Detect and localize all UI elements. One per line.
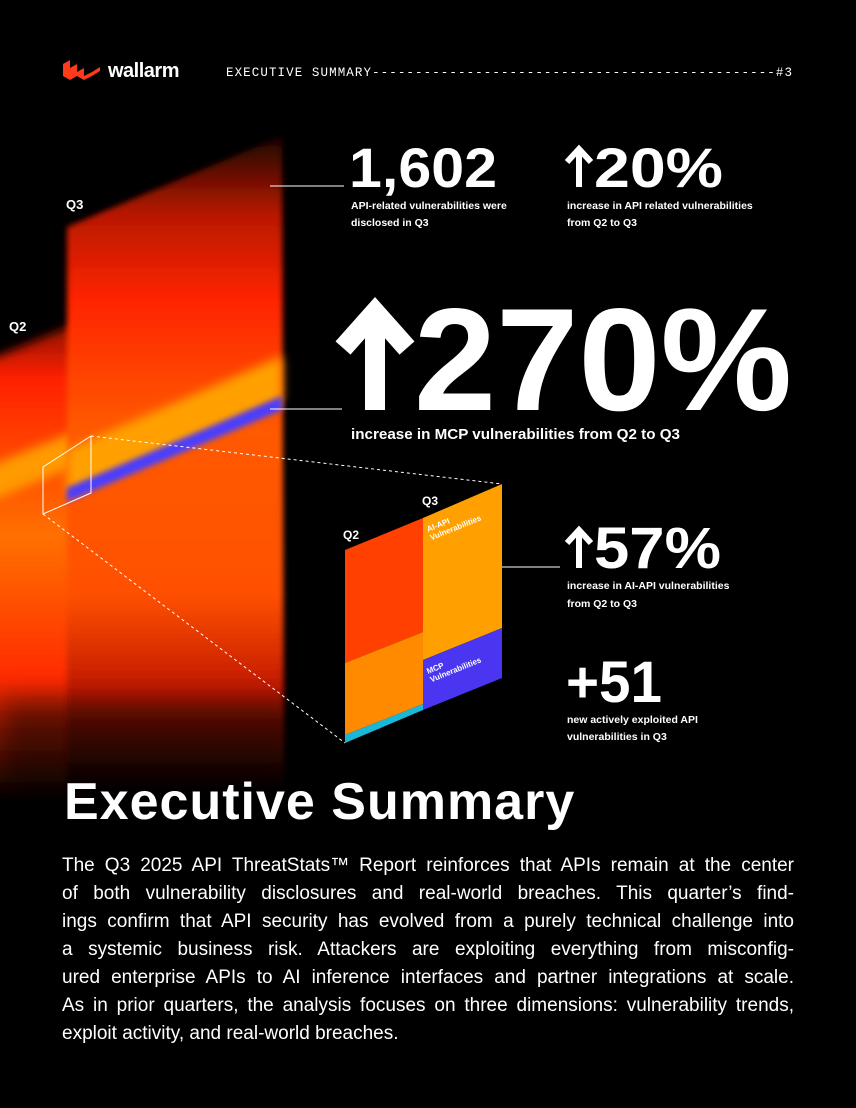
stat 270%: 270% (414, 278, 792, 441)
body text: ings confirm that API security has evolved from a purely technical challenge into (62, 911, 794, 932)
label Q2: Q2 (9, 319, 26, 334)
stat 1602: disclosed in Q3 (351, 217, 429, 229)
logo: wallarm (107, 60, 179, 82)
small chart: Vulnerabilities (429, 655, 483, 684)
stat 1602: API-related vulnerabilities were (351, 200, 507, 212)
body text: of both vulnerability disclosures and real-world breaches. This quarter’s find- (62, 883, 794, 904)
body text: The Q3 2025 API ThreatStats™ Report reinforces that APIs remain at the center (62, 855, 794, 876)
stat 20%: from Q2 to Q3 (567, 217, 637, 229)
stat 1602 (349, 136, 507, 229)
small chart: MCP (425, 661, 446, 676)
connector lines (270, 186, 560, 567)
header label: EXECUTIVE SUMMARY-----------------------------------------------#3 (226, 66, 792, 80)
stat 20%: increase in API related vulnerabilities (567, 200, 753, 212)
body text: a systemic business risk. Attackers are exploiting everything from misconfig- (62, 939, 794, 960)
main graphic (0, 136, 792, 798)
body text: ured enterprise APIs to AI inference interfaces and partner integrations at scale. (62, 967, 794, 988)
stat 1602: 1,602 (349, 136, 497, 199)
stat 57%: 57% (594, 516, 721, 581)
stat 57%: from Q2 to Q3 (567, 598, 637, 610)
stat +51: new actively exploited API (567, 714, 698, 726)
body text (62, 855, 794, 1044)
small chart: AI-API (425, 517, 451, 534)
title: Executive Summary (64, 773, 575, 831)
stat 270%: increase in MCP vulnerabilities from Q2 to Q3 (351, 427, 680, 443)
body text: exploit activity, and real-world breaches. (62, 1023, 399, 1044)
small chart: Q3 (422, 494, 438, 508)
label Q3: Q3 (66, 197, 83, 212)
stat 57%: increase in AI-API vulnerabilities (567, 580, 730, 592)
Q2 plane (0, 318, 90, 800)
stat +51 (566, 650, 698, 743)
Q3 plane (0, 136, 300, 820)
body text: As in prior quarters, the analysis focuses on three dimensions: vulnerability trends, (62, 995, 794, 1016)
zoom box (43, 436, 502, 743)
stat +51: vulnerabilities in Q3 (567, 731, 667, 743)
logo (63, 60, 179, 82)
small chart: Q2 (343, 528, 359, 542)
stat 57% (567, 516, 730, 610)
small chart: Vulnerabilities (429, 513, 483, 542)
small chart (343, 484, 502, 743)
stat 20% (567, 136, 753, 229)
stat +51: +51 (566, 650, 662, 715)
header (63, 60, 792, 82)
stat 20%: 20% (594, 136, 723, 199)
